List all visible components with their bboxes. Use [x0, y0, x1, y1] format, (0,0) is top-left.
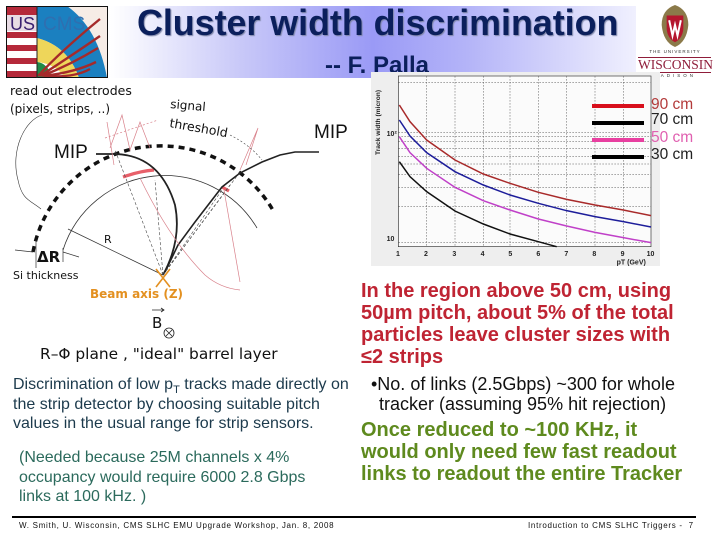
chart background — [371, 72, 660, 266]
title band — [110, 6, 636, 78]
inner sensor arc — [63, 176, 257, 250]
red finding text — [361, 280, 674, 368]
red finding text: 50µm pitch, about 5% of the total — [361, 302, 674, 324]
diagram: R-phi barrel layer: (pixels, strips, ..) — [10, 102, 110, 116]
footer right: Introduction to CMS SLHC Triggers - 7 — [528, 521, 694, 530]
right MIP track — [165, 152, 319, 272]
diagram: R-phi barrel layer: B — [152, 314, 162, 332]
discrimination text — [13, 376, 349, 432]
needed-because note — [19, 449, 305, 505]
diagram: R-phi barrel layer: R — [104, 233, 112, 246]
chart axis labels: 3 — [452, 251, 456, 258]
delta R arrows — [15, 240, 79, 268]
legend — [592, 96, 693, 163]
legend: 90 cm — [592, 104, 644, 108]
dashed rays — [115, 150, 240, 275]
logo: US CMS — [6, 6, 108, 78]
legend: 30 cm — [592, 155, 644, 159]
R line — [68, 229, 163, 275]
diagram: R-phi barrel layer: MIP — [314, 122, 348, 143]
red finding text: In the region above 50 cm, using — [361, 280, 671, 302]
links bullet — [371, 374, 675, 414]
chart axis labels: 10 — [647, 251, 655, 258]
left MIP track — [96, 154, 177, 275]
logo: University of Wisconsin: WISCONSIN — [638, 57, 713, 72]
legend: 90 cm — [651, 96, 693, 113]
discrimination text: Discrimination of low pT tracks made directly on — [13, 376, 349, 396]
title: Cluster width discrimination — [137, 3, 618, 43]
needed-because note: (Needed because 25M channels x 4% — [19, 449, 289, 466]
legend: 30 cm — [651, 146, 693, 163]
MIP labels: MIP — [54, 142, 88, 163]
diagram: R-phi barrel layer: Beam axis (Z) — [90, 287, 183, 301]
diagram: R-phi barrel layer — [10, 83, 348, 363]
crest — [662, 5, 688, 47]
chart axis labels: 2 — [424, 251, 428, 258]
diagram: R-phi barrel layer: R–Φ plane , "ideal" barrel layer — [40, 345, 278, 363]
diagram labels: read out electrodes — [10, 83, 132, 98]
green conclusion text — [361, 419, 682, 485]
magnetic field symbol — [152, 308, 174, 338]
logo: US CMS: CMS — [43, 14, 85, 35]
curve: 70 cm — [399, 120, 651, 227]
chart axis labels — [375, 90, 655, 266]
red signal curves — [105, 115, 258, 290]
legend: 70 cm — [592, 121, 644, 125]
discrimination text: values in the usual range for strip sensors. — [13, 415, 314, 432]
green conclusion text: Once reduced to ~100 KHz, it — [361, 419, 637, 441]
curve: 30 cm — [399, 162, 557, 247]
footer rule — [12, 516, 696, 518]
links bullet: tracker (assuming 95% hit rejection) — [379, 394, 666, 414]
diagram: R-phi barrel layer: signal — [170, 97, 206, 114]
diagram: R-phi barrel layer: threshold — [168, 115, 229, 140]
chart axis labels: 5 — [508, 251, 512, 258]
needed-because note: occupancy would require 6000 2.8 Gbps — [19, 468, 305, 486]
green conclusion text: would only need few fast readout — [361, 441, 677, 463]
diagram: R-phi barrel layer: ΔR — [37, 248, 61, 266]
red hit segments — [123, 170, 154, 177]
wisconsin wordmark: THE UNIVERSITY — [649, 49, 701, 54]
chart axis labels: 8 — [592, 251, 596, 258]
green conclusion text: links to readout the entire Tracker — [361, 463, 682, 485]
needed-because note: links at 100 kHz. ) — [19, 488, 146, 505]
chart axis labels: 4 — [481, 251, 485, 258]
chart axis labels: Track width (micron) — [375, 90, 382, 155]
red finding text: ≤2 strips — [361, 346, 443, 368]
beam axis marker — [156, 269, 170, 287]
chart axis labels: pT (GeV) — [617, 259, 646, 266]
signal threshold leader — [230, 135, 262, 160]
chart axis labels: 6 — [536, 251, 540, 258]
curve: 90 cm — [399, 105, 651, 216]
red finding text: particles leave cluster sizes with — [361, 324, 670, 346]
chart: track width vs pT — [371, 72, 660, 266]
curve: 50 cm — [399, 137, 651, 243]
legend: 70 cm — [651, 111, 693, 128]
electrodes leader — [16, 115, 42, 209]
chart axis labels: 7 — [564, 251, 568, 258]
logo: University of Wisconsin: MADISON — [654, 73, 696, 78]
chart axis labels: 9 — [621, 251, 625, 258]
outer dashed sensor arc — [33, 146, 274, 252]
logo: University of Wisconsin — [638, 5, 713, 78]
footer left: W. Smith, U. Wisconsin, CMS SLHC EMU Upgrade Workshop, Jan. 8, 2008 — [19, 521, 334, 530]
logo: US CMS: US — [10, 14, 35, 34]
chart axis labels: 10² — [387, 131, 397, 138]
chart axis labels: 1 — [396, 251, 400, 258]
chart axis labels: 10 — [387, 236, 395, 243]
links bullet: •No. of links (2.5Gbps) ~300 for whole — [371, 374, 675, 394]
diagram: R-phi barrel layer: Si thickness — [13, 269, 79, 282]
legend: 50 cm — [651, 129, 693, 146]
legend: 50 cm — [592, 138, 644, 142]
discrimination text: the strip detector by choosing suitable pitch — [13, 396, 320, 412]
